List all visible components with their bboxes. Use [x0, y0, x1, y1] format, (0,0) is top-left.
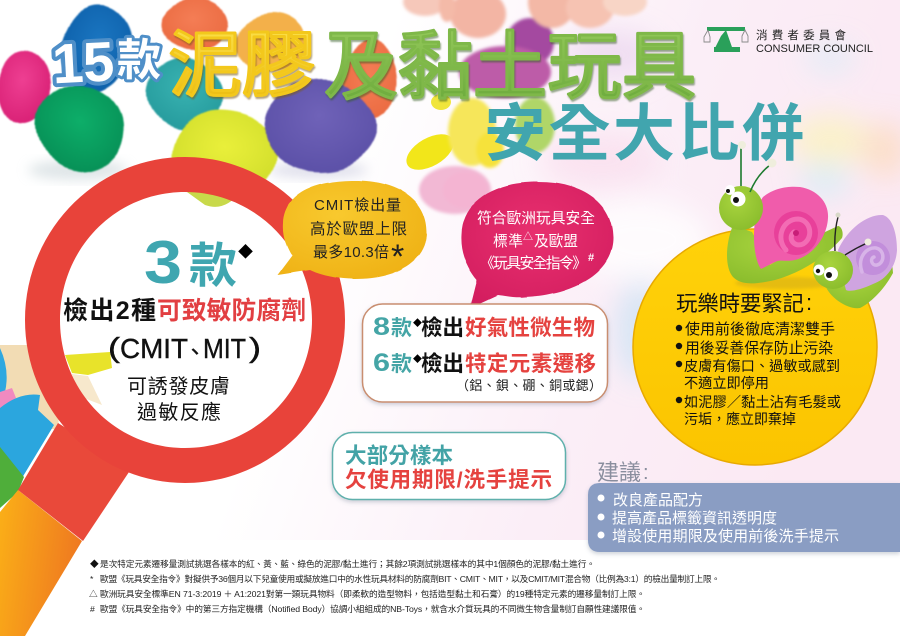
speech bubble: CMIT exceeds limit: 最多10.3倍 — [313, 243, 389, 261]
footnotes: 歐盟《玩具安全指令》中的第三方指定機構（Notified Body）協調小組組成的NB-Toys，就含水介質玩具的不同微生物含量制訂自願性建議限值。 — [100, 603, 645, 614]
title: clay and dough toys: 及黏土玩具 — [324, 25, 696, 108]
photo: modelling clay balls — [0, 0, 491, 214]
panel: recommendations: 改良產品配方 — [613, 492, 703, 509]
title: clay and dough toys: 泥膠 — [168, 26, 316, 106]
text in lens: 3 samples: MIT — [203, 333, 246, 364]
icon: pink snail — [719, 141, 843, 289]
logo: Consumer Council: CONSUMER COUNCIL — [756, 43, 873, 55]
magnifying glass — [0, 157, 345, 636]
panel: reminders circle: 皮膚有傷口、過敏或感到 — [684, 358, 840, 374]
panel: reminders circle: 不適立即停用 — [684, 375, 769, 392]
panel: microbes and element migration: 款 — [391, 317, 412, 340]
photo: hands pressing purple clay — [403, 0, 647, 208]
text in lens: 3 samples — [63, 229, 306, 424]
panel: reminders circle: 用後妥善保存防止污染 — [685, 340, 833, 357]
speech bubble: CMIT exceeds limit — [277, 180, 427, 279]
panel: microbes and element migration: （鋁、鋇、硼、銅或鍶） — [456, 378, 602, 393]
text in lens: 3 samples: 過敏反應 — [137, 400, 221, 424]
text in lens: 3 samples: 3 — [144, 229, 182, 296]
panel: microbes and element migration: 特定元素遷移 — [465, 351, 596, 376]
speech bubble: meets EU standards: 符合歐洲玩具安全 — [477, 209, 595, 227]
icon: scales — [704, 29, 748, 52]
speech bubble: CMIT exceeds limit: 高於歐盟上限 — [310, 220, 407, 238]
speech bubble: meets EU standards: 《玩具安全指令》 — [480, 255, 587, 272]
panel: missing expiry date and handwash reminder — [332, 432, 566, 500]
panel: microbes and element migration: 款 — [391, 353, 412, 376]
text in lens: 3 samples: ◆ — [238, 244, 253, 261]
handle: red part — [18, 423, 131, 541]
text in lens: 3 samples: 可誘發皮膚 — [127, 375, 230, 398]
logo: Consumer Council: 消費者委員會 — [756, 28, 846, 42]
panel: reminders circle: : — [806, 290, 812, 315]
speech bubble: meets EU standards: 及歐盟 — [534, 233, 578, 250]
footnotes: 是次特定元素遷移量測試挑選各樣本的紅、黃、藍、綠色的泥膠/黏土進行；其餘2項測試挑選樣本的其中1個顏色的泥膠/黏土進行。 — [100, 558, 595, 569]
panel: reminders circle: 使用前後徹底清潔雙手 — [685, 321, 835, 338]
panel: microbes and element migration: ◆ — [413, 354, 422, 364]
panel: reminders circle: 如泥膠／黏土沾有毛髮或 — [684, 395, 841, 411]
ring — [25, 157, 345, 483]
speech bubble: meets EU standards — [461, 182, 613, 308]
clay seen through lens — [65, 192, 240, 405]
text in lens: 3 samples: CMIT — [120, 333, 188, 364]
text in lens: 3 samples: 可致敏防腐劑 — [157, 297, 306, 325]
panel: microbes and element migration: 好氣性微生物 — [465, 316, 595, 340]
text in lens: 3 samples: ( — [108, 332, 121, 363]
panel: reminders circle — [633, 229, 877, 465]
title: 15 samples — [51, 29, 161, 95]
footnotes: 歐洲玩具安全標準EN 71-3:2019 ＋ A1:2021對第一類玩具物料（即柔軟的造型物料，包括造型黏土和石膏）的19種特定元素的遷移量制訂上限。 — [100, 588, 645, 599]
footnotes: # — [90, 604, 95, 614]
panel: microbes and element migration: 檢出 — [421, 315, 464, 340]
panel: missing expiry date and handwash reminder: 欠使用期限/洗手提示 — [345, 467, 552, 492]
speech bubble: CMIT exceeds limit: CMIT檢出量 — [314, 197, 401, 214]
text in lens: 3 samples: ) — [249, 332, 261, 363]
heading: recommendations: : — [643, 462, 649, 484]
text in lens: 3 samples: 款 — [189, 240, 237, 293]
footnotes: * — [90, 574, 94, 584]
panel: missing expiry date and handwash reminder: 大部分樣本 — [345, 444, 453, 468]
icon: purple snail — [813, 212, 897, 308]
title: 15 samples: 15 — [51, 29, 116, 95]
panel: microbes and element migration: 檢出 — [421, 351, 464, 376]
footnotes: △ — [89, 589, 98, 599]
lens — [58, 192, 312, 448]
panel: microbes and element migration: 8 — [373, 313, 390, 341]
heading: recommendations: 建議 — [597, 460, 641, 485]
handle: orange part — [0, 490, 82, 636]
title: 15 samples: 款 — [117, 36, 161, 85]
speech bubble: meets EU standards: △ — [523, 231, 533, 243]
title: safety comparison: 安全大比併 — [484, 100, 804, 169]
photo: clay on wooden board, bottom left — [0, 345, 60, 508]
speech bubble: meets EU standards: 標準 — [493, 233, 523, 250]
panel: reminders circle: 污垢，應立即棄掉 — [684, 411, 796, 427]
logo: Consumer Council — [704, 28, 873, 55]
text in lens: 3 samples: 、 — [184, 340, 206, 365]
footnotes — [89, 558, 720, 614]
footnotes: ◆ — [90, 559, 99, 569]
text in lens: 3 samples: 檢出2種 — [63, 296, 156, 325]
panel: recommendations: 增設使用期限及使用前後洗手提示 — [612, 528, 839, 545]
panel: recommendations: 提高產品標籤資訊透明度 — [612, 510, 777, 527]
panel: reminders circle: 玩樂時要緊記 — [676, 292, 804, 316]
panel: recommendations — [588, 483, 900, 552]
panel: microbes and element migration: 6 — [373, 349, 390, 377]
panel: microbes and element migration — [362, 304, 608, 402]
speech bubble: CMIT exceeds limit: * — [391, 238, 404, 276]
panel: microbes and element migration: ◆ — [413, 318, 422, 328]
footnotes: 歐盟《玩具安全指令》對擬供予36個月以下兒童使用或擬放進口中的水性玩具材料的防腐劑BIT、CMIT、MIT，以及CMIT/MIT混合物（比例為3:1）的檢出量制訂上限。 — [100, 573, 720, 584]
speech bubble: meets EU standards: # — [588, 252, 594, 264]
